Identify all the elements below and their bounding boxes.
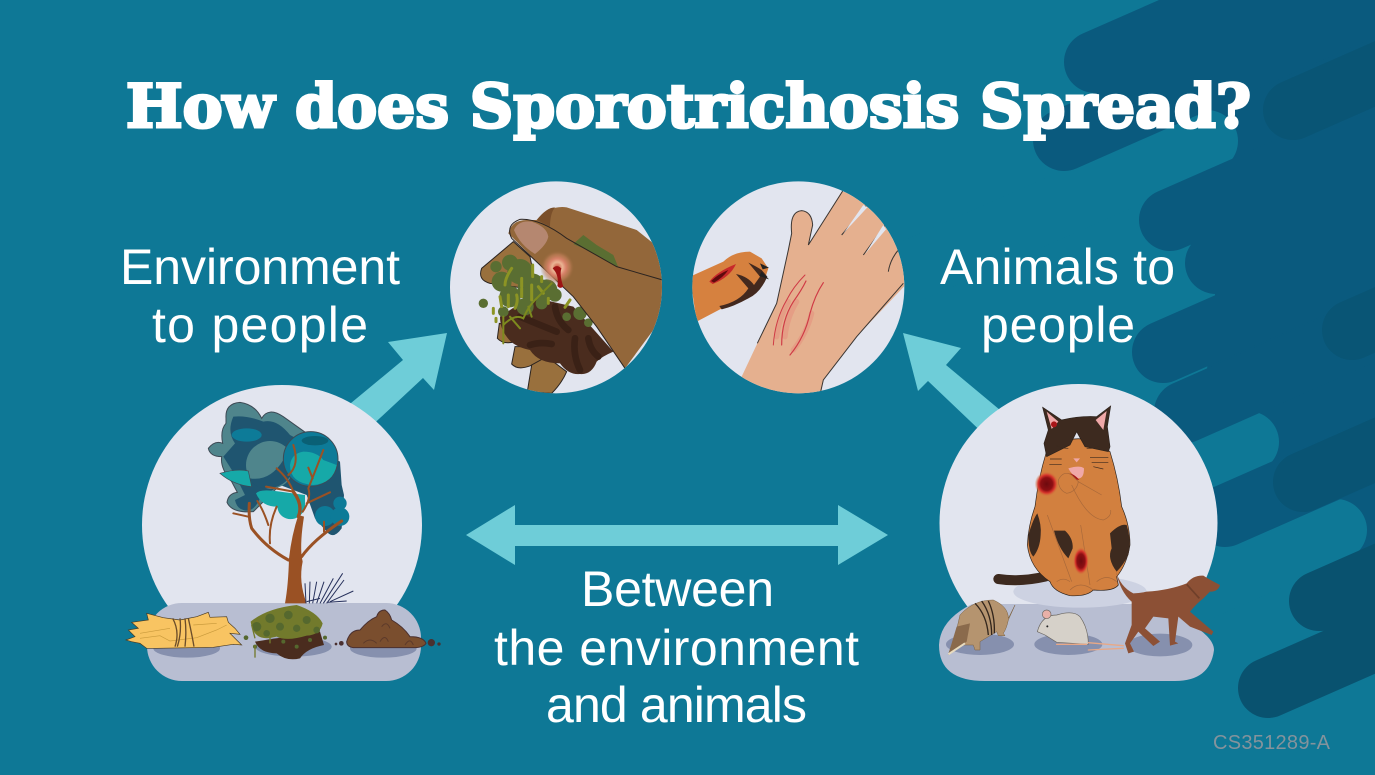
heading: environment to people: Environment [120, 239, 400, 295]
heading: between the environment and animals [494, 561, 859, 733]
soil creases [520, 307, 598, 370]
cat leg [690, 252, 768, 322]
scratches [773, 275, 823, 355]
blood drop [553, 266, 563, 288]
document code: CS351289-A [1213, 732, 1331, 754]
icon: moss-covered soil [244, 605, 327, 659]
hand outline [757, 190, 903, 392]
leg wound [709, 264, 736, 284]
scratch glow [777, 302, 812, 350]
moss grains and strands [493, 265, 570, 343]
ground shadows [153, 637, 417, 658]
gaps between fingers [843, 205, 886, 254]
moss [479, 255, 593, 327]
cat shadow [1013, 576, 1147, 608]
arrow: animals to people [903, 333, 1012, 440]
heading: between the environment and animals: Between [581, 561, 774, 617]
heading: animals to people [940, 239, 1175, 353]
panel ground [939, 604, 1214, 681]
background wave bands [900, 0, 1375, 688]
illustrations: cat, armadillo, rat, dog [946, 406, 1220, 656]
heading: environment to people [120, 239, 400, 353]
illustrations: tree, hay, moss, soil [126, 402, 441, 659]
fingers [481, 242, 567, 393]
icon: soil pile [335, 610, 441, 648]
panel circle [940, 384, 1218, 662]
icon: cat paw scratching a hand [690, 181, 913, 400]
icon: dog [1116, 571, 1220, 653]
panel ground [147, 603, 421, 681]
icon: armadillo [948, 600, 1015, 654]
icon: hand holding moss and soil [450, 181, 670, 393]
icon: tree [208, 402, 353, 603]
icon: cat [998, 406, 1130, 596]
thumbnail [514, 221, 548, 254]
panel circle [142, 385, 422, 665]
arrow: environment to people [345, 333, 447, 432]
heading: environment to people: to people [152, 297, 368, 353]
paw dark fur [719, 263, 767, 309]
soil [500, 297, 613, 374]
icon: hay bundle [126, 612, 242, 648]
title: How does Sporotrichosis Spread? [126, 72, 1251, 142]
heading: between the environment and animals: the environment [494, 620, 859, 676]
wound on thumb [540, 252, 572, 284]
heading: animals to people: Animals to [940, 239, 1175, 295]
heading: animals to people: people [981, 297, 1135, 353]
claws [759, 263, 769, 279]
arrow: between environment and animals [466, 505, 888, 565]
panel: environment [126, 385, 441, 681]
palm and thumb [508, 207, 670, 368]
panel: animals [939, 384, 1220, 681]
ground shadows [946, 634, 1192, 656]
thumb outline [510, 219, 663, 368]
moss on back of hand [573, 235, 618, 267]
heading: between the environment and animals: and animals [546, 677, 807, 733]
icon: rat [1037, 610, 1123, 650]
human hand [742, 192, 913, 400]
